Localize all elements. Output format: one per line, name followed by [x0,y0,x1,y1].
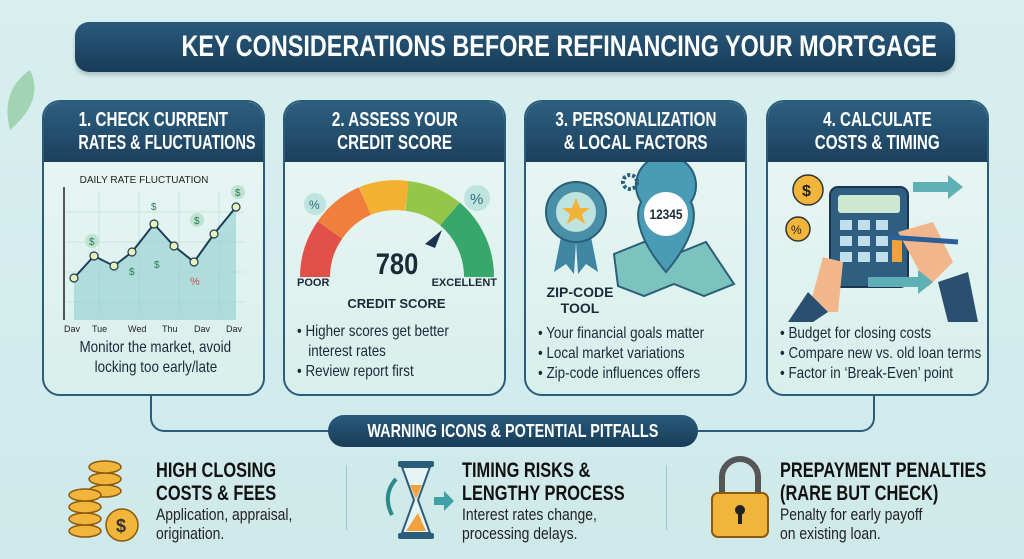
title banner: KEY CONSIDERATIONS BEFORE REFINANCING YOUR MORTGAGE [182,30,937,63]
icon: hourglass [386,461,454,539]
caption 1 [80,339,231,376]
line chart: DAILY RATE FLUCTUATION [80,175,208,186]
gauge labels: EXCELLENT [432,277,497,289]
bullets 2: interest rates [308,343,386,360]
title banner [75,22,955,72]
icon: coins [68,460,139,542]
timing text: TIMING RISKS & [462,459,590,482]
bullets 3: • Zip-code influences offers [538,365,700,382]
warning pill: WARNING ICONS & POTENTIAL PITFALLS [368,421,658,441]
line chart: $ [154,260,160,271]
zip tool illustration [545,162,736,298]
line chart: $ [194,216,200,227]
panel: check rates [42,100,265,396]
line chart: % [190,276,200,288]
panel: credit score [283,100,506,396]
panel heading 3 [526,102,745,162]
pitfall: prepayment penalties: Penalty for early payoff [780,505,922,524]
pitfall: closing costs [68,459,292,543]
bullets 2: • Review report first [297,363,414,380]
panel heading 1: 1. CHECK CURRENT [79,109,228,131]
panel heading 4 [768,102,987,162]
caption 1: Monitor the market, avoid [80,339,231,356]
dividers [346,465,347,530]
pitfall: prepayment penalties: on existing loan. [780,524,881,543]
bullets 2 [297,323,449,380]
bullets 3 [538,325,704,382]
warning pill [328,415,698,447]
bullets 4 [780,325,981,382]
panel heading 3: 3. PERSONALIZATION [555,109,716,131]
panel heading 4: COSTS & TIMING [815,132,940,154]
timing text [462,459,625,505]
zip tool illustration: 12345 [649,206,683,222]
pitfall: timing risks: processing delays. [462,524,577,543]
pitfall: closing costs: origination. [156,524,224,543]
panel heading 1 [44,102,263,162]
panel heading 4: 4. CALCULATE [823,109,932,131]
panel heading 1: RATES & FLUCTUATIONS [78,132,255,154]
icon: coins: $ [116,516,126,536]
connector line [150,396,875,432]
panel: personalization [524,100,747,396]
prepayment text: PREPAYMENT PENALTIES [780,459,986,482]
pitfall: timing risks [386,459,625,543]
gauge [300,180,494,280]
line chart: $ [235,188,241,199]
zip-code tool label: TOOL [561,300,599,316]
bullets 3: • Your financial goals matter [538,325,704,342]
pitfall: timing risks: Interest rates change, [462,505,597,524]
calculator illustration: % [791,223,802,237]
closing cost text: HIGH CLOSING [156,459,276,482]
panel heading 2: 2. ASSESS YOUR [332,109,457,131]
pitfall: prepayment penalties [711,456,986,543]
gauge labels: POOR [297,277,329,289]
bullets 2: • Higher scores get better [297,323,449,340]
prepayment text: (RARE BUT CHECK) [780,482,938,505]
bullets 4: • Budget for closing costs [780,325,931,342]
line chart: $ [89,237,95,248]
panel heading 2 [285,102,504,162]
pitfall: closing costs: Application, appraisal, [156,505,292,524]
bullets 3: • Local market variations [538,345,685,362]
icon: padlock [711,456,769,538]
gauge: % [470,191,483,208]
panel: costs and timing [766,100,989,396]
zip-code tool label [546,284,613,316]
calculator illustration: $ [802,183,811,200]
bullets 4: • Compare new vs. old loan terms [780,345,981,362]
gauge: 780 [376,247,418,280]
panel heading 2: CREDIT SCORE [337,132,452,154]
panel heading 3: & LOCAL FACTORS [564,132,707,154]
gauge labels [297,277,497,289]
line chart: $ [151,202,157,213]
timing text: LENGTHY PROCESS [462,482,625,505]
calculator illustration [785,174,978,322]
zip-code tool label: ZIP-CODE [547,284,613,300]
prepayment text [780,459,986,505]
gauge: % [309,198,320,212]
credit score label: CREDIT SCORE [347,296,446,311]
decorative leaves left [8,70,34,130]
caption 1: locking too early/late [94,359,217,376]
bullets 4: • Factor in ‘Break-Even’ point [780,365,953,382]
line chart [63,175,245,332]
line chart: $ [129,267,135,278]
closing cost text: COSTS & FEES [156,482,276,505]
closing cost text [156,459,276,505]
